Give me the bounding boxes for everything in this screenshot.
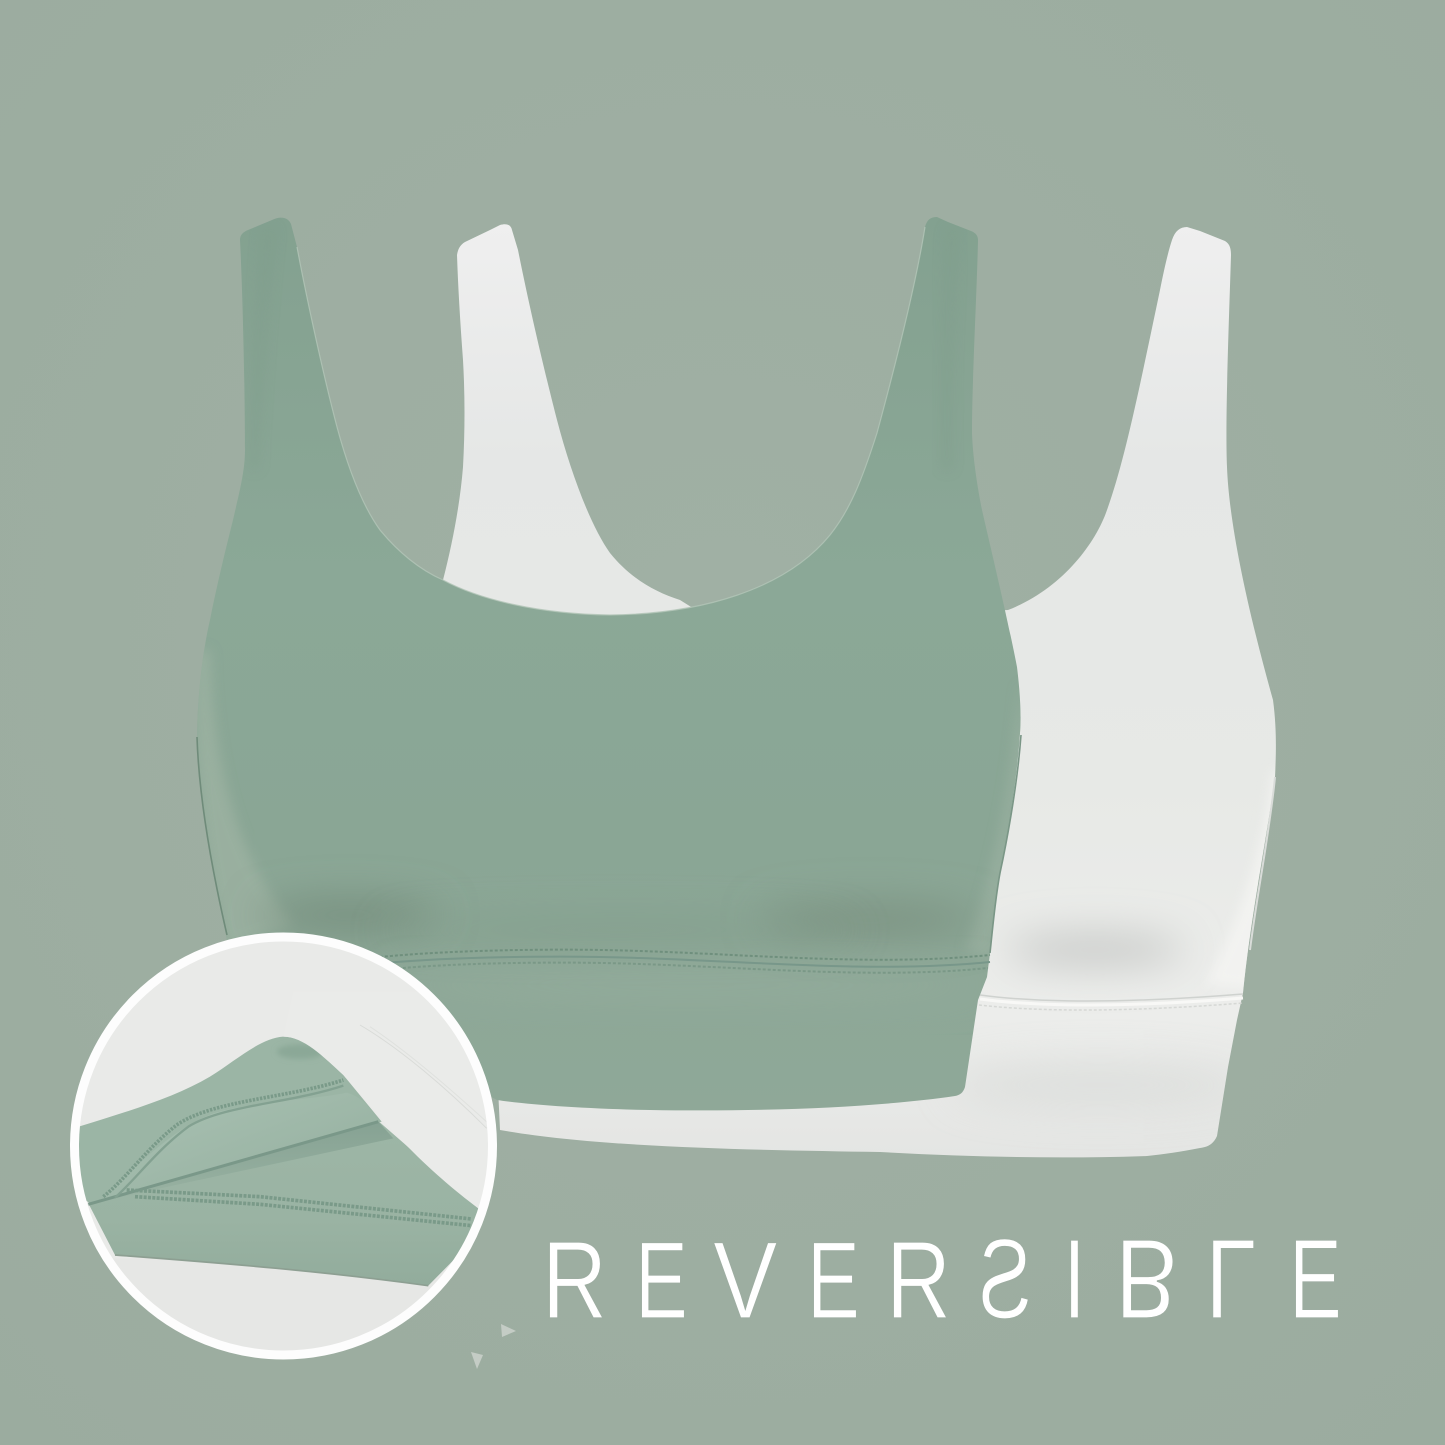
lens white ring bbox=[74, 937, 492, 1355]
white bra side panel line bbox=[1250, 777, 1275, 950]
small arrow mark right bbox=[501, 1324, 516, 1337]
lower green band bbox=[88, 1121, 478, 1286]
title: REVERSIBLE with mirrored letters bbox=[542, 1215, 1342, 1343]
inner flap bbox=[210, 1112, 219, 1116]
green bra shading bbox=[195, 228, 1026, 995]
white bra (back layer) bbox=[443, 224, 1285, 1157]
band stitching bbox=[127, 1190, 472, 1219]
white bra hem stitching bbox=[980, 994, 1243, 1001]
white bra shading bbox=[1012, 811, 1270, 1092]
lens details drawn in zoom coordinates bbox=[79, 1024, 487, 1286]
title: REVERSIBLE with mirrored letters: I bbox=[1063, 1216, 1086, 1343]
title: REVERSIBLE with mirrored letters: L bbox=[1205, 1215, 1257, 1341]
title: REVERSIBLE with mirrored letters: B bbox=[1115, 1215, 1178, 1341]
infographic canvas bbox=[70, 217, 1338, 1369]
flap stitching bbox=[103, 1080, 343, 1197]
title: REVERSIBLE with mirrored letters: E bbox=[1289, 1216, 1342, 1342]
title: REVERSIBLE with mirrored letters: E bbox=[635, 1219, 688, 1342]
green bra outer edge lines bbox=[197, 737, 227, 935]
title: REVERSIBLE with mirrored letters: S bbox=[978, 1215, 1032, 1342]
seam shadows bbox=[88, 1122, 378, 1204]
title: REVERSIBLE with mirrored letters: E bbox=[807, 1219, 860, 1342]
green bra (front layer) bbox=[195, 217, 1026, 1110]
title: REVERSIBLE with mirrored letters: R bbox=[886, 1220, 951, 1342]
crease shadow bbox=[196, 1122, 393, 1176]
title: REVERSIBLE with mirrored letters: R bbox=[542, 1220, 607, 1342]
detail lens: fabric close-up bbox=[60, 925, 510, 1365]
apex shadow bbox=[278, 1044, 320, 1059]
green neckline highlight bbox=[297, 227, 925, 615]
white fabric faint seam bbox=[360, 1025, 487, 1128]
small arrow mark down bbox=[471, 1352, 483, 1369]
folded green fabric bbox=[73, 1037, 382, 1203]
title: REVERSIBLE with mirrored letters: V bbox=[713, 1218, 778, 1341]
white fold bbox=[284, 1036, 478, 1208]
green hem stitching bbox=[380, 950, 990, 960]
